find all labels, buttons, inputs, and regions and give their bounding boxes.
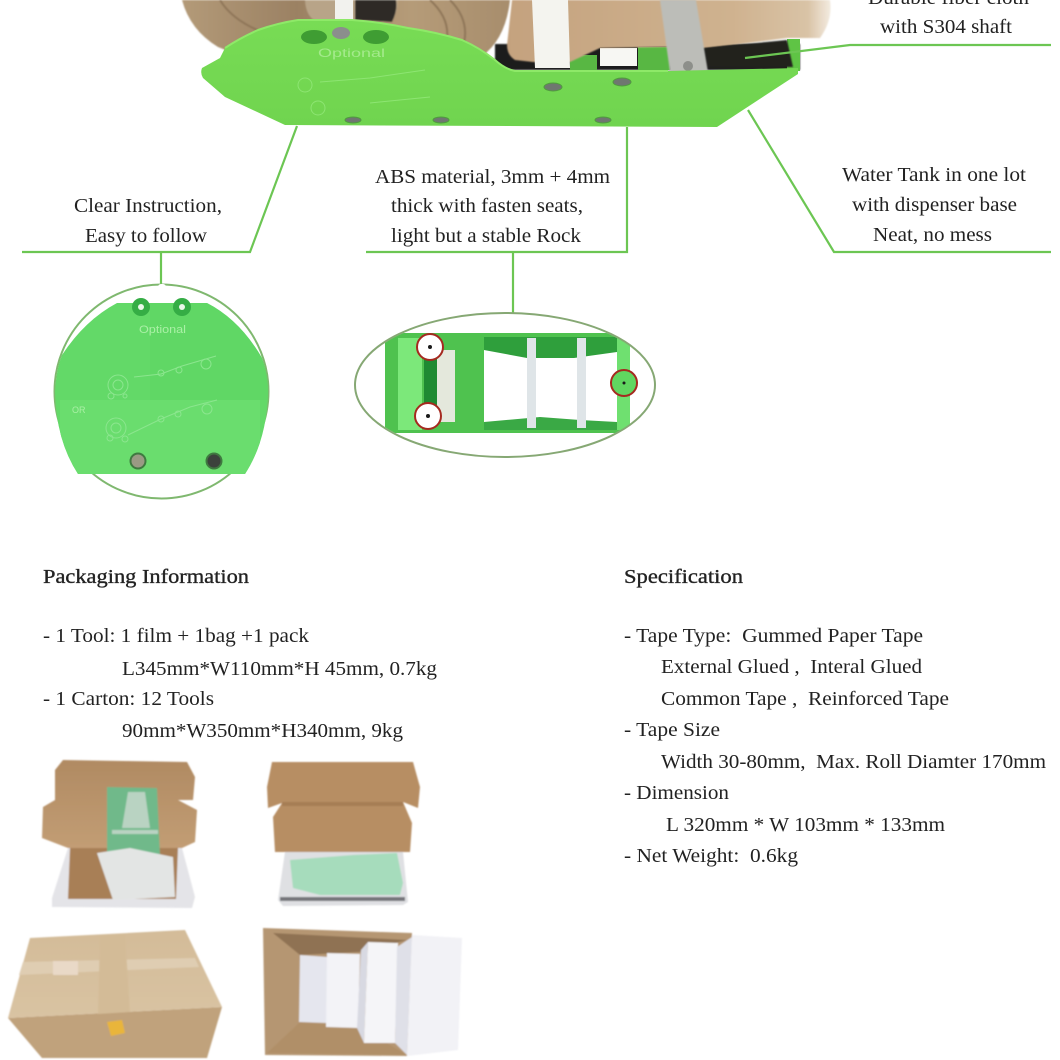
or label: OR <box>72 405 86 415</box>
photo: open tool box with bagged dispenser <box>42 760 197 908</box>
inner tray <box>385 333 630 433</box>
callout: water tank: Water Tank in one lot <box>842 164 1026 186</box>
callout: ABS material: thick with fasten seats, <box>391 195 583 217</box>
carton floor <box>267 1022 407 1055</box>
product photo: dispenser base with tape <box>182 0 831 127</box>
box base <box>278 852 408 906</box>
white box 4 side <box>395 937 412 1055</box>
callout: fiber cloth <box>868 0 1029 38</box>
bottom rivets <box>130 454 146 468</box>
paper sheet <box>507 0 831 62</box>
notch <box>158 284 166 301</box>
embossed label: Optional <box>318 46 385 60</box>
specification text: - Dimension <box>624 782 729 804</box>
heading: Specification <box>624 566 743 588</box>
cutter screw <box>683 61 693 71</box>
packing tape <box>19 958 199 975</box>
carton front <box>8 1007 222 1058</box>
yellow label <box>107 1020 125 1036</box>
callout: instruction: Clear Instruction, <box>74 195 222 217</box>
specification text: - Net Weight: 0.6kg <box>624 845 798 867</box>
photo: sealed carton <box>8 930 222 1058</box>
seats marked with red circles <box>415 334 637 429</box>
carton outer <box>263 928 412 1056</box>
callout: ABS material <box>375 166 610 247</box>
callout: instruction <box>74 195 222 247</box>
white box 1 <box>299 955 328 1023</box>
dark interior <box>495 44 800 70</box>
white box 3 front <box>364 942 398 1043</box>
callout: ABS material: light but a stable Rock <box>391 225 581 247</box>
box interior <box>68 848 178 899</box>
photo: open carton with tool boxes <box>263 928 462 1056</box>
white front roller <box>532 0 570 68</box>
leader lines <box>22 45 1051 313</box>
green bag <box>107 787 160 855</box>
plate rim highlight <box>225 20 668 71</box>
seat dots <box>426 345 626 418</box>
heading: Packaging Information <box>43 566 249 588</box>
specification text: - Tape Type: Gummed Paper Tape <box>624 625 923 647</box>
detail circle: instruction plate <box>50 284 275 498</box>
packaging information text: L345mm*W110mm*H 45mm, 0.7kg <box>122 658 437 680</box>
white rear roller <box>600 48 637 66</box>
box base <box>52 848 195 908</box>
metal cutter blade <box>660 0 708 72</box>
white box 2 <box>326 953 360 1028</box>
white box 3 side <box>357 942 368 1043</box>
white box 4 front <box>407 935 462 1056</box>
carton back flap <box>273 933 407 955</box>
packaging information text: 90mm*W350mm*H340mm, 9kg <box>122 720 403 742</box>
top holes <box>132 298 191 316</box>
specification text: Width 30-80mm, Max. Roll Diamter 170mm <box>661 751 1046 773</box>
packaging information text: - 1 Carton: 12 Tools <box>43 688 214 710</box>
callout: fiber cloth: with S304 shaft <box>880 16 1012 38</box>
embossed diagram <box>298 70 430 115</box>
green right wall <box>787 39 800 71</box>
white bag <box>97 848 175 900</box>
inner green wall <box>570 47 670 70</box>
callout: water tank: Neat, no mess <box>873 224 992 246</box>
callout: water tank <box>842 164 1026 246</box>
red label <box>53 961 78 975</box>
specification text: L 320mm * W 103mm * 133mm <box>666 814 945 836</box>
optional label: Optional <box>139 324 186 336</box>
specification text: - Tape Size <box>624 719 720 741</box>
green plate <box>50 300 275 475</box>
bagged dispenser <box>290 853 403 895</box>
detail ellipse: fasten seats <box>355 313 655 457</box>
callout: instruction: Easy to follow <box>85 225 208 247</box>
specification text: Common Tape , Reinforced Tape <box>661 688 949 710</box>
ellipse outline <box>355 313 655 457</box>
box base dark edge <box>280 897 405 901</box>
tape roll <box>182 0 510 80</box>
circle outline <box>54 284 268 498</box>
lid fold shadow <box>282 802 403 806</box>
callout: water tank: with dispenser base <box>852 194 1017 216</box>
box lid <box>42 760 197 848</box>
callout: ABS material: ABS material, 3mm + 4mm <box>375 166 610 188</box>
black tape brush <box>705 40 793 67</box>
embossed diagram <box>106 356 217 442</box>
specification text <box>624 566 1046 867</box>
rivets <box>345 78 631 123</box>
photo: open tool box side view <box>267 762 420 906</box>
specification text: External Glued , Interal Glued <box>661 656 922 678</box>
bag highlight <box>112 792 158 834</box>
support rods <box>527 338 586 428</box>
box lid <box>267 762 420 852</box>
packaging information text <box>43 566 437 742</box>
packaging information text: - 1 Tool: 1 film + 1bag +1 pack <box>43 625 309 647</box>
green base plate <box>201 20 798 127</box>
carton top <box>8 930 222 1018</box>
base plate holes <box>301 30 389 44</box>
carton centre tape <box>98 934 130 1014</box>
centre screw <box>332 27 350 39</box>
shaft <box>335 0 353 22</box>
